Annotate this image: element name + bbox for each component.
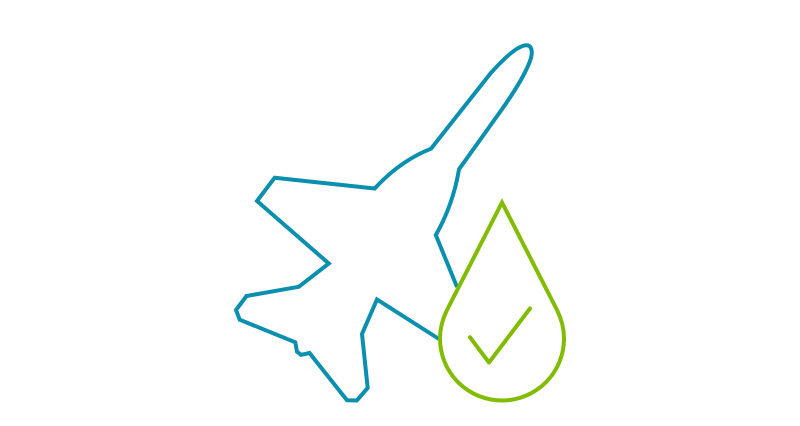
icon: fuel drop: [440, 202, 564, 400]
icon: aircraft outline: [236, 45, 532, 401]
icon: check mark: [470, 308, 530, 362]
